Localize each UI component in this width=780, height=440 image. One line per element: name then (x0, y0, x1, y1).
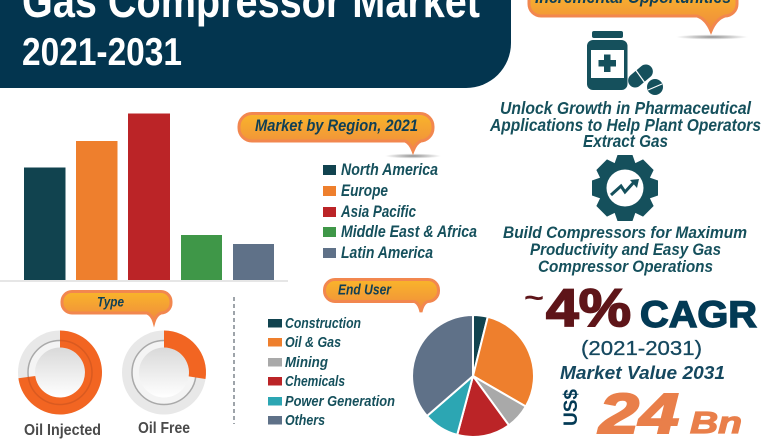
label: oil injected: Oil Injected (24, 422, 101, 439)
text: maximum productivity opportunity: Compressor Operations (538, 257, 713, 276)
title (22, 0, 480, 74)
legend: end user (268, 316, 395, 429)
legend: end user: Others (285, 413, 325, 429)
text: pharmaceutical opportunity: Unlock Growth in Pharmaceutical (500, 98, 752, 118)
label: oil free: Oil Free (138, 420, 190, 437)
stat: CAGR: CAGR (640, 294, 757, 335)
legend: end user: Mining (285, 355, 328, 371)
stat: CAGR: (2021-2031) (581, 338, 702, 360)
stat: market value 2031: Bn (690, 405, 742, 440)
legend: region (323, 161, 477, 262)
text: maximum productivity opportunity: Productivity and Easy Gas (530, 240, 721, 259)
donut: oil injected (18, 330, 102, 439)
pie chart: end user (412, 315, 534, 437)
text: maximum productivity opportunity: Build Compressors for Maximum (503, 223, 747, 242)
callout: end user: End User (338, 282, 392, 298)
header banner (0, 0, 511, 88)
legend: region: Latin America (341, 244, 433, 262)
stat: market value 2031: US$ (561, 389, 582, 426)
legend: region: Middle East & Africa (341, 223, 477, 241)
callout: type: Type (97, 294, 124, 310)
callout: market by region: Market by Region, 2021 (255, 117, 418, 135)
text: pharmaceutical opportunity: Extract Gas (583, 131, 668, 151)
legend: end user: Chemicals (285, 374, 345, 390)
stat: CAGR: 4% (546, 279, 631, 338)
callout: incremental opportunities (529, 0, 748, 40)
stat: market value 2031: Market Value 2031 (560, 363, 725, 383)
callout: market by region (239, 114, 441, 158)
legend: end user: Power Generation (285, 394, 395, 410)
icon: medicine bottle and pills (587, 31, 663, 95)
callout: end user (324, 280, 438, 312)
bar chart: market by region (0, 114, 288, 282)
stat: CAGR (524, 279, 757, 360)
icon: gear with growth arrow (592, 155, 658, 221)
legend: region: Asia Pacific (340, 203, 416, 221)
legend: end user: Construction (285, 316, 361, 332)
legend: region: North America (341, 161, 438, 179)
legend: region: Europe (341, 182, 388, 200)
title: 2021-2031 (22, 31, 182, 74)
stat: CAGR: ~ (524, 282, 544, 313)
text: maximum productivity opportunity (503, 223, 747, 276)
legend: end user: Oil & Gas (285, 335, 341, 351)
text: pharmaceutical opportunity (489, 98, 761, 151)
callout: type (62, 292, 171, 322)
stat: market value 2031 (560, 363, 742, 440)
donut: oil free (122, 330, 206, 437)
